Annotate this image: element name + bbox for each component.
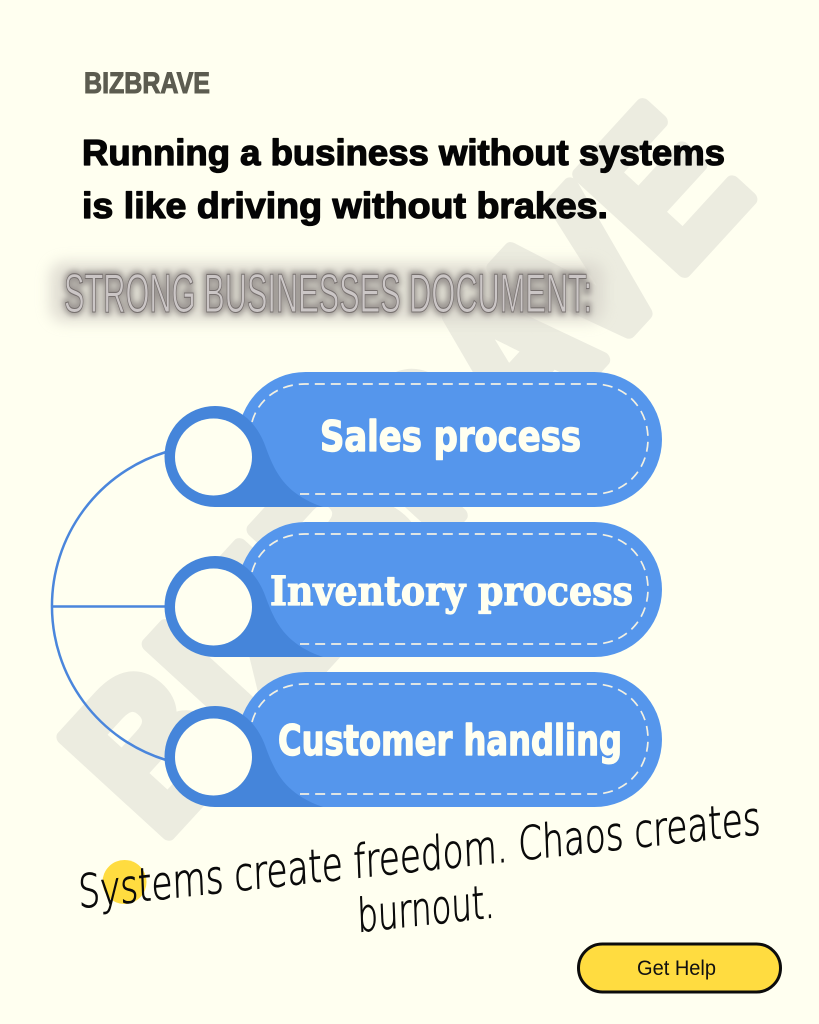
closing handwritten line	[77, 791, 761, 943]
connector arc	[52, 452, 166, 760]
button: get help: Get Help	[637, 957, 716, 980]
button: get help	[578, 944, 780, 992]
brand name: BIZBRAVE	[84, 67, 210, 100]
pill: customer handling	[164, 672, 662, 807]
pill: inventory process	[164, 522, 662, 657]
title: Running a business without systems	[82, 132, 725, 173]
icon: yellow dot	[102, 860, 146, 904]
pill: sales process	[164, 372, 662, 507]
title	[82, 132, 725, 226]
pill: customer handling: Customer handling	[278, 716, 622, 765]
pill: sales process: Sales process	[320, 412, 581, 461]
closing handwritten line: burnout.	[356, 874, 496, 943]
title: is like driving without brakes.	[82, 185, 608, 226]
pill: inventory process: Inventory process	[270, 568, 633, 615]
